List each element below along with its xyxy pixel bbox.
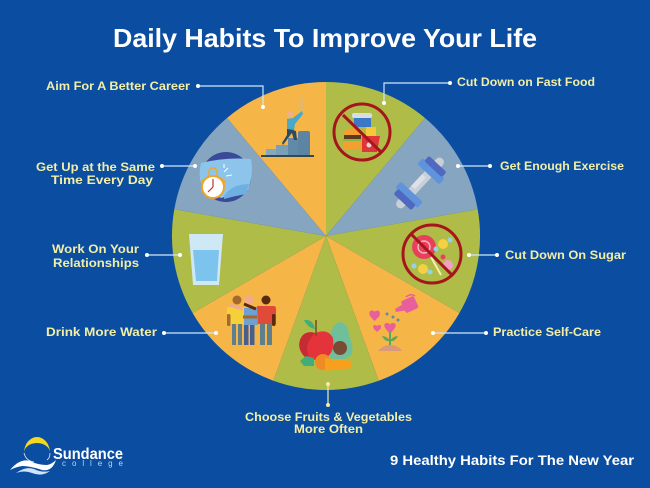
callout: fruits and vegetables: Choose Fruits & Vegetables bbox=[245, 412, 412, 424]
callout: relationships bbox=[52, 244, 182, 270]
slice: relationships bbox=[172, 209, 326, 313]
logo: Sundance College bbox=[10, 437, 124, 475]
callout: fruits and vegetables bbox=[245, 382, 412, 436]
icon: dumbbell bbox=[387, 149, 453, 217]
icon: watering can and hearts bbox=[369, 295, 419, 351]
slice: get up bbox=[174, 118, 326, 236]
callout: get up: Time Every Day bbox=[51, 175, 154, 187]
callout: fast food: Cut Down on Fast Food bbox=[457, 77, 595, 89]
icon: banned sweets bbox=[403, 225, 461, 283]
callout: fruits and vegetables: More Often bbox=[294, 424, 363, 436]
slice: exercise bbox=[326, 118, 478, 236]
slice: sugar bbox=[326, 209, 480, 313]
icon: group of friends bbox=[227, 296, 276, 345]
slice: water bbox=[193, 236, 326, 381]
icon: fruits and vegetables bbox=[299, 320, 353, 371]
callout: water bbox=[46, 327, 218, 339]
slice: fast food bbox=[326, 82, 425, 236]
callout: relationships: Relationships bbox=[53, 258, 139, 270]
icon: banned fast food bbox=[334, 104, 390, 160]
callout: water: Drink More Water bbox=[46, 327, 158, 339]
slice: fruits and vegetables bbox=[273, 236, 379, 390]
callout: sugar bbox=[467, 250, 627, 262]
icon: alarm clock and pillow bbox=[200, 152, 252, 202]
logo: Sundance College: college bbox=[62, 459, 124, 468]
callout: career: Aim For A Better Career bbox=[46, 81, 191, 93]
callout: fast food bbox=[382, 77, 595, 105]
slice: career bbox=[227, 82, 326, 236]
icon: climbing stairs bbox=[261, 98, 314, 157]
callout: career bbox=[46, 81, 265, 109]
callout: self-care bbox=[431, 327, 601, 339]
footer tagline: 9 Healthy Habits For The New Year bbox=[390, 453, 635, 468]
callout: self-care: Practice Self-Care bbox=[493, 327, 601, 339]
callout: get up bbox=[36, 162, 197, 187]
callout: get up: Get Up at the Same bbox=[36, 162, 155, 174]
callout: exercise: Get Enough Exercise bbox=[500, 161, 624, 173]
title: Daily Habits To Improve Your Life bbox=[113, 23, 537, 53]
slice: self-care bbox=[326, 236, 459, 381]
pie wheel bbox=[172, 82, 480, 390]
callout: sugar: Cut Down On Sugar bbox=[505, 250, 627, 262]
icon: glass of water bbox=[189, 234, 223, 285]
callout: relationships: Work On Your bbox=[52, 244, 140, 256]
callout: exercise bbox=[456, 161, 624, 173]
logo: Sundance College: Sundance bbox=[53, 446, 123, 463]
